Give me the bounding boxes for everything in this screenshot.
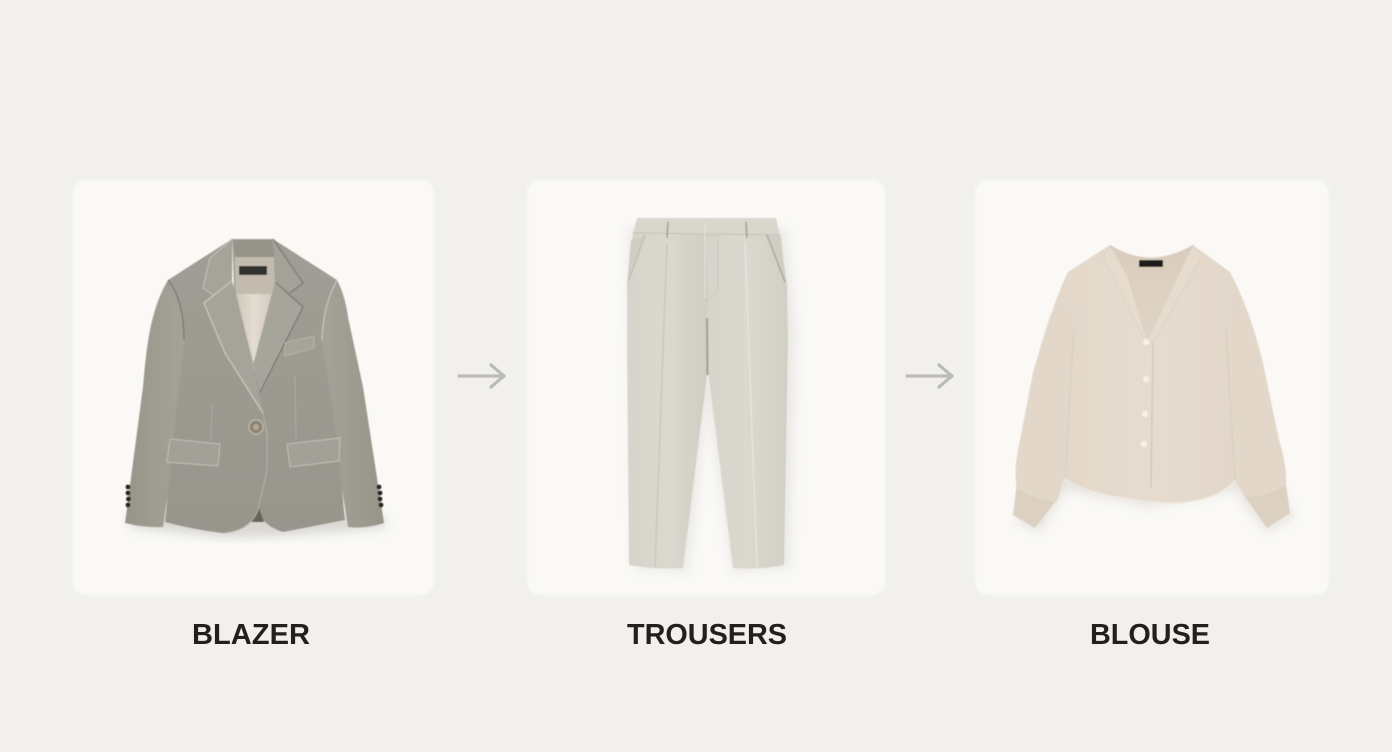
dark hem gap bbox=[251, 505, 264, 522]
neck lining back bbox=[232, 239, 276, 368]
right cuff bbox=[1243, 478, 1290, 528]
right collar bbox=[273, 239, 303, 293]
left sleeve bbox=[125, 280, 184, 527]
right front panel bbox=[250, 239, 345, 532]
left leg bbox=[627, 233, 708, 569]
blazer card bbox=[73, 180, 434, 595]
arrow: blazer to trousers bbox=[459, 365, 504, 387]
left lapel bbox=[204, 281, 263, 413]
chest pocket bbox=[285, 336, 314, 356]
label: BLAZER: BLAZER bbox=[192, 619, 310, 651]
arrow: trousers to blouse bbox=[907, 365, 952, 387]
black neck label bbox=[1139, 260, 1163, 267]
panel: blouse bbox=[975, 180, 1329, 651]
panel: blazer bbox=[73, 180, 434, 651]
left collar bbox=[203, 239, 232, 295]
body bbox=[1065, 245, 1235, 503]
armhole seams bbox=[168, 280, 184, 340]
right lapel bbox=[253, 282, 303, 392]
right flap pocket bbox=[287, 438, 340, 467]
sleeve cuff buttons bbox=[126, 485, 383, 507]
buttons bbox=[1141, 339, 1149, 447]
right sleeve bbox=[1226, 272, 1286, 497]
black neck label bbox=[239, 266, 267, 275]
icon: blouse garment bbox=[1013, 245, 1294, 532]
darts bbox=[211, 375, 296, 440]
panel: trousers bbox=[527, 180, 885, 651]
creases bbox=[655, 243, 667, 567]
placket bbox=[1151, 343, 1153, 487]
trousers card bbox=[527, 180, 885, 595]
fly bbox=[705, 236, 718, 300]
right leg bbox=[704, 233, 788, 569]
sleeve seams bbox=[1065, 330, 1235, 480]
hem line bbox=[1065, 478, 1235, 503]
left cuff bbox=[1013, 482, 1059, 528]
belt loops bbox=[667, 222, 747, 238]
left front panel bbox=[165, 239, 267, 533]
icon: blazer garment bbox=[125, 239, 388, 538]
lining bbox=[235, 257, 275, 366]
left flap pocket bbox=[167, 439, 220, 466]
blouse card bbox=[975, 180, 1329, 595]
front edge highlight bbox=[223, 413, 267, 533]
pockets bbox=[627, 235, 645, 285]
neck inner bbox=[1110, 245, 1193, 340]
waistband bbox=[633, 218, 780, 235]
collar band left bbox=[1103, 245, 1147, 343]
right sleeve bbox=[322, 280, 384, 528]
label: BLOUSE: BLOUSE bbox=[1090, 619, 1210, 651]
inseam shadow bbox=[706, 318, 708, 375]
icon: trousers garment bbox=[627, 218, 796, 572]
lapel button bbox=[249, 420, 263, 434]
label: TROUSERS: TROUSERS bbox=[627, 619, 787, 651]
left sleeve bbox=[1016, 272, 1074, 502]
collar band right bbox=[1147, 245, 1202, 343]
